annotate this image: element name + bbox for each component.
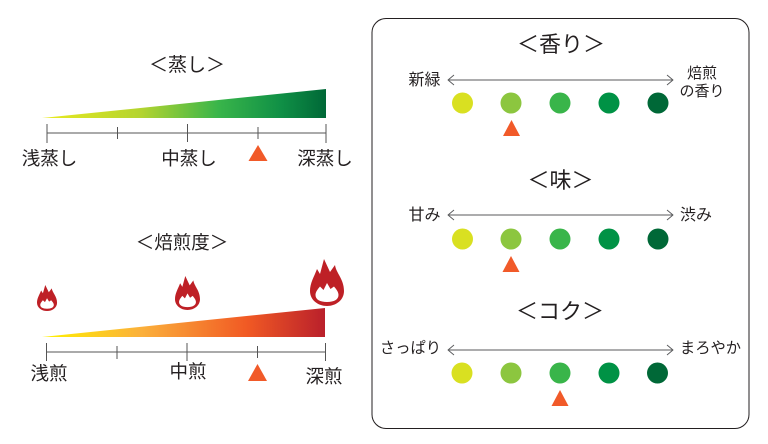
steaming label: medium: 中蒸し [161, 148, 217, 169]
section: aroma [408, 32, 725, 136]
roast marker triangle [248, 364, 267, 381]
roast label: light: 浅煎 [30, 363, 68, 384]
heading: roast level: ＜焙煎度＞ [136, 232, 228, 253]
roast gradient wedge [42, 308, 325, 337]
panel: flavor profile [372, 18, 749, 428]
panel: roast level [30, 232, 344, 387]
label: light and clean: さっぱり [380, 340, 441, 357]
steaming scale axis [47, 124, 326, 143]
heading: steaming: ＜蒸し＞ [149, 54, 225, 76]
steaming label: deep: 深蒸し [297, 148, 353, 169]
label: roasted aroma: の香り [679, 83, 725, 100]
label: astringent: 渋み [680, 206, 712, 224]
label: roasted aroma: 焙煎 [687, 65, 717, 82]
steaming gradient wedge [42, 89, 326, 118]
heading: taste: ＜味＞ [527, 168, 594, 193]
label: fresh green: 新緑 [408, 71, 441, 89]
section: body [380, 299, 741, 406]
color dots [452, 228, 668, 250]
double arrow [448, 345, 673, 355]
roast label: medium: 中煎 [169, 361, 207, 382]
double arrow [448, 75, 673, 85]
icon: medium flame [175, 276, 200, 310]
marker triangle [552, 390, 568, 406]
color dots [452, 362, 668, 384]
section: taste [408, 168, 712, 272]
color dots [452, 92, 668, 114]
icon: small flame [37, 285, 57, 311]
roast label: deep: 深煎 [305, 366, 343, 387]
panel: steaming [22, 54, 353, 169]
double arrow [448, 210, 673, 220]
heading: body: ＜コク＞ [516, 299, 604, 324]
roast scale axis [46, 343, 326, 361]
steaming marker triangle [248, 145, 268, 161]
label: mellow: まろやか [680, 340, 741, 357]
icon: large flame [310, 259, 344, 306]
heading: aroma: ＜香り＞ [517, 32, 605, 57]
marker triangle [503, 120, 520, 136]
marker triangle [502, 256, 520, 272]
label: sweet: 甘み [408, 206, 441, 224]
steaming label: light: 浅蒸し [22, 148, 77, 169]
